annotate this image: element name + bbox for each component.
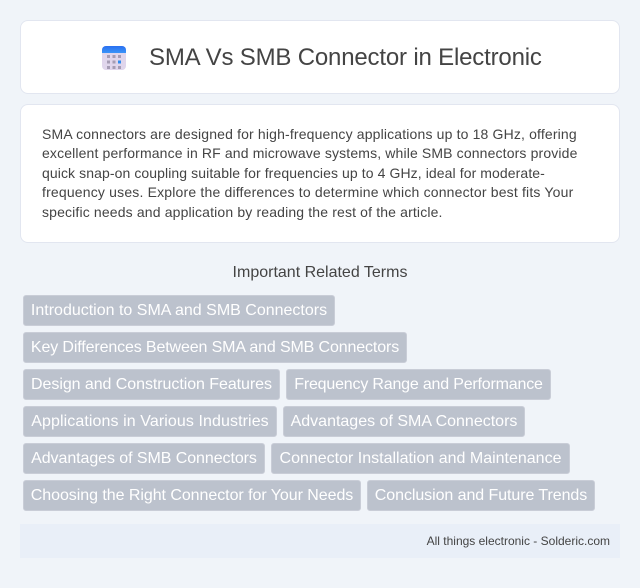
- tag: Frequency Range and Performance: [294, 376, 543, 393]
- tag: Key Differences Between SMA and SMB Connectors: [31, 339, 399, 356]
- footer text: All things electronic - Solderic.com: [427, 534, 610, 548]
- tag: [283, 406, 525, 437]
- text block: description: frequency uses. Explore the differences to determine which connector best fits Your: [42, 184, 573, 200]
- tag: Introduction to SMA and SMB Connectors: [31, 302, 327, 319]
- tags: related terms: [23, 295, 595, 511]
- tag: Applications in Various Industries: [31, 413, 269, 430]
- tag: [367, 480, 595, 511]
- tag: [23, 295, 335, 326]
- tag: Design and Construction Features: [31, 376, 272, 393]
- tag: [271, 443, 570, 474]
- tag: [23, 443, 265, 474]
- tag: Advantages of SMA Connectors: [291, 413, 517, 430]
- text block: description: excellent performance in RF and microwave systems, while SMB connectors provide: [42, 145, 578, 161]
- panel: header: [20, 20, 620, 94]
- tag: Conclusion and Future Trends: [375, 487, 587, 504]
- heading: important related terms: Important Related Terms: [233, 264, 407, 281]
- panel: description: [20, 104, 620, 243]
- tag: [286, 369, 551, 400]
- tag: [23, 369, 280, 400]
- tag: Choosing the Right Connector for Your Needs: [31, 487, 353, 504]
- tag: [23, 480, 361, 511]
- tag: Connector Installation and Maintenance: [280, 450, 561, 467]
- footer: [20, 524, 620, 558]
- tag: [23, 406, 277, 437]
- text block: description: SMA connectors are designed for high-frequency applications up to 18 GHz, offering: [42, 126, 577, 142]
- text block: description: quick snap-on coupling suitable for frequencies up to 4 GHz, ideal for moderate-: [42, 165, 545, 181]
- title: SMA Vs SMB Connector in Electronic: [149, 44, 542, 71]
- tag: Advantages of SMB Connectors: [31, 450, 257, 467]
- text block: description: specific needs and application by reading the rest of the article.: [42, 204, 443, 220]
- icon: calendar: [102, 46, 126, 70]
- tag: [23, 332, 407, 363]
- text block: description: [42, 126, 578, 220]
